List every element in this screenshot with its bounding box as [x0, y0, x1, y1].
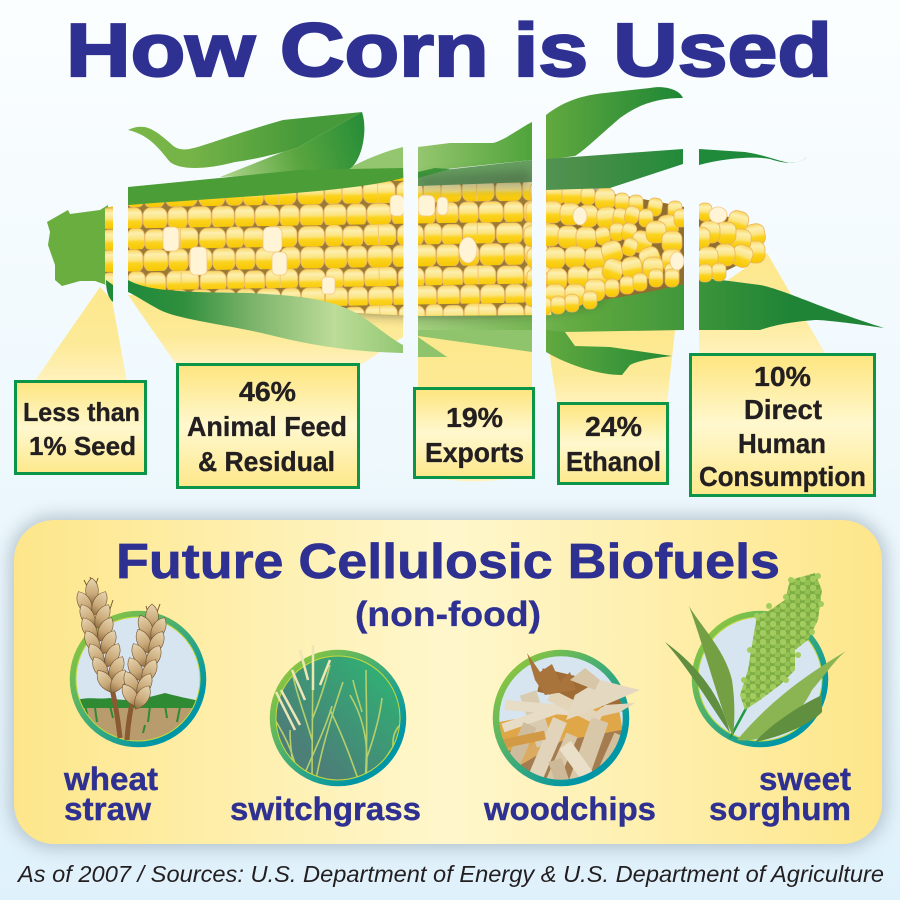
gaps: [113, 85, 699, 405]
stem sliver: [106, 280, 113, 302]
far right leaf tip: [699, 149, 807, 165]
title: How Corn is Used: [66, 8, 832, 92]
light leaf behind band: [340, 147, 403, 172]
box: direct human consumption: [690, 354, 874, 496]
box: exports: Exports: [425, 437, 524, 468]
box: direct human consumption: Direct: [744, 394, 822, 425]
label: sweet sorghum: sweet: [759, 761, 851, 797]
box: ethanol: Ethanol: [566, 446, 661, 477]
subheading: (non-food): [355, 595, 541, 634]
label: wheat straw: wheat: [63, 761, 158, 797]
kernels: [105, 177, 766, 316]
corn cob: [47, 87, 884, 375]
box: exports: [414, 388, 534, 478]
box: animal feed: & Residual: [198, 446, 335, 477]
box: direct human consumption: Human: [738, 428, 826, 459]
top husk band: [128, 168, 403, 205]
leaf fold: [220, 112, 364, 177]
label: woodchips: woodchips: [483, 791, 656, 827]
top left curly leaf: [128, 112, 362, 168]
hanging leaf: [546, 330, 672, 375]
cob base: [105, 177, 755, 315]
leaf behind cob: [418, 330, 532, 357]
husk base: [47, 205, 112, 287]
panel shadow: [10, 516, 886, 848]
box: seed: [16, 382, 146, 474]
box: animal feed: [178, 364, 358, 488]
source footer: As of 2007 / Sources: U.S. Department of Energy & U.S. Department of Agriculture: [16, 861, 884, 887]
box: ethanol: 24%: [585, 411, 642, 442]
label: wheat straw: straw: [64, 791, 151, 827]
cob shadow: [140, 172, 600, 316]
callout rays: [34, 253, 826, 481]
box: seed: Less than: [23, 397, 140, 427]
box: ethanol: [558, 404, 668, 484]
icon: woodchips: [490, 653, 640, 790]
label: wheat straw: [63, 761, 158, 827]
lower right husk leaf: [418, 275, 884, 336]
middle upper leaf: [418, 122, 532, 172]
icon: switchgrass: [265, 645, 403, 785]
middle band: [418, 160, 532, 186]
white kernels: [163, 195, 727, 294]
box: animal feed: Animal Feed: [187, 411, 347, 442]
label: switchgrass: switchgrass: [230, 791, 421, 827]
box: exports: 19%: [446, 402, 503, 433]
heading: Future Cellulosic Biofuels: [116, 535, 780, 589]
tall right leaf: [546, 87, 683, 160]
right band: [546, 149, 683, 190]
label: sweet sorghum: sorghum: [709, 791, 851, 827]
box: direct human consumption: Consumption: [699, 461, 866, 492]
box: direct human consumption: 10%: [754, 361, 811, 392]
box: seed: 1% Seed: [29, 431, 136, 461]
lower left husk leaf: [128, 280, 403, 353]
box: animal feed: 46%: [239, 376, 296, 407]
icon: wheat straw: [70, 577, 210, 758]
panel: future cellulosic biofuels: [14, 520, 882, 844]
label: sweet sorghum: [709, 761, 851, 827]
icon: sweet sorghum: [665, 573, 846, 744]
